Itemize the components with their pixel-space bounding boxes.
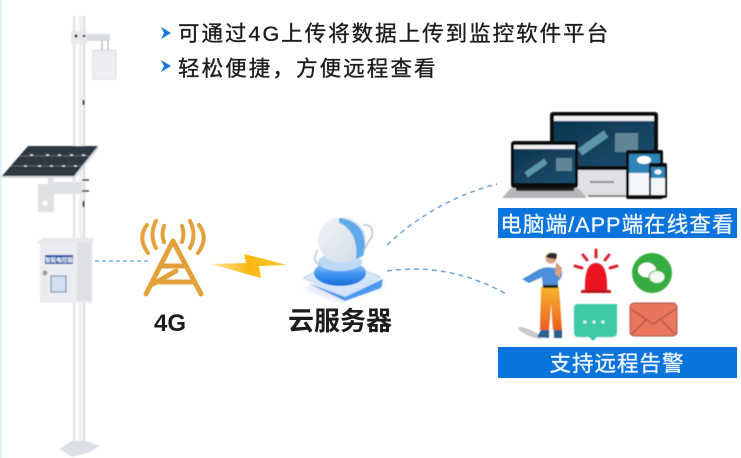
pole base plate (59, 441, 100, 457)
icon: 4G tower (142, 221, 204, 294)
label: 4G: 4G (154, 310, 186, 337)
dashed link: cloud to screens (387, 184, 497, 245)
monitoring pole with solar panel and control box (2, 16, 116, 457)
devices illustration (502, 112, 667, 199)
icon: envelope (630, 303, 677, 336)
banner: remote alarm: 支持远程告警 (549, 352, 685, 376)
banner: remote alarm (498, 347, 737, 378)
tablet (626, 150, 663, 199)
control box (37, 238, 93, 303)
person on phone (517, 252, 562, 341)
solar panel (2, 146, 99, 178)
icon: red alarm (575, 250, 617, 293)
intro bullets (161, 22, 610, 81)
icon: WeChat (632, 253, 672, 293)
dashed link: cloud to alerts (387, 269, 508, 295)
sensor arm and sensor (71, 31, 116, 79)
desktop monitor (550, 112, 658, 197)
pole (73, 16, 85, 441)
alert illustrations (517, 250, 677, 341)
icon: lightning bolt (211, 254, 287, 278)
banner: online viewing: 电脑端/APP端在线查看 (500, 213, 735, 237)
bullet 2: 轻松便捷，方便远程查看 (178, 57, 438, 81)
phone (649, 163, 667, 198)
solar panel bracket (38, 178, 89, 212)
dashed link: box to tower (95, 260, 150, 262)
icon: cloud server (303, 217, 384, 302)
laptop (502, 141, 587, 198)
icon: message bubble (574, 304, 617, 341)
label: cloud server: 云服务器 (288, 306, 392, 336)
control box: 智能电控箱 (45, 256, 73, 264)
bullet 1: 可通过4G上传将数据上传到监控软件平台 (178, 22, 610, 46)
